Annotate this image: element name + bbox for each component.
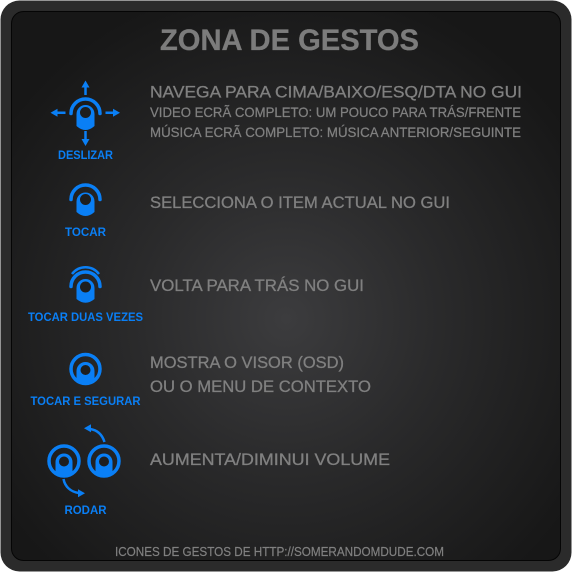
icon: double tap gesture xyxy=(71,267,100,303)
text: swipe description: VIDEO ECRÃ COMPLETO: UM POUCO PARA TRÁS/FRENTE xyxy=(150,104,521,120)
text: press and hold description: OU O MENU DE CONTEXTO xyxy=(150,377,371,396)
label: rotate: RODAR xyxy=(64,503,107,517)
text: tap description: SELECCIONA O ITEM ACTUAL NO GUI xyxy=(150,193,450,212)
icon: tap gesture xyxy=(71,185,100,216)
icon: press and hold gesture xyxy=(71,354,100,384)
text: press and hold description: MOSTRA O VISOR (OSD) xyxy=(150,353,344,372)
text: swipe description xyxy=(150,82,522,140)
text: press and hold description xyxy=(150,353,371,396)
icon: rotate gesture xyxy=(49,424,119,497)
title: ZONA DE GESTOS xyxy=(160,24,419,57)
icon: swipe gesture xyxy=(50,80,120,146)
label: double tap: TOCAR DUAS VEZES xyxy=(28,310,143,324)
text: swipe description: MÚSICA ECRÃ COMPLETO: MÚSICA ANTERIOR/SEGUINTE xyxy=(150,124,521,140)
text: rotate description: AUMENTA/DIMINUI VOLUME xyxy=(150,450,390,469)
label: swipe: DESLIZAR xyxy=(58,148,113,162)
label: tap: TOCAR xyxy=(65,225,106,239)
footer credit: ICONES DE GESTOS DE HTTP://SOMERANDOMDUDE.COM xyxy=(115,545,444,559)
text: double tap description: VOLTA PARA TRÁS NO GUI xyxy=(150,276,364,295)
text: swipe description: NAVEGA PARA CIMA/BAIXO/ESQ/DTA NO GUI xyxy=(150,82,522,102)
label: press and hold: TOCAR E SEGURAR xyxy=(30,394,141,408)
